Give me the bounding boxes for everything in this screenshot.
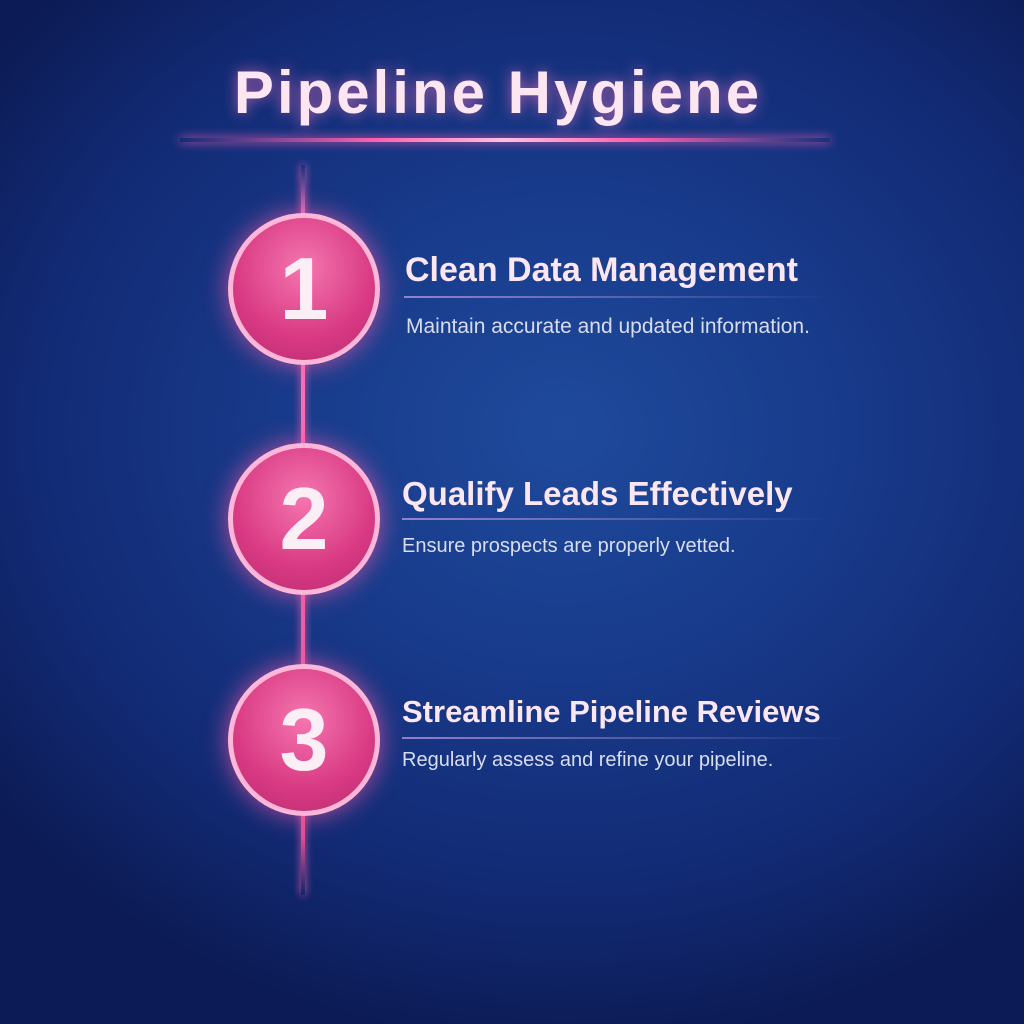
- description 3: Regularly assess and refine your pipeline.: [402, 749, 773, 771]
- number circle 1: [228, 213, 380, 365]
- heading 3: Streamline Pipeline Reviews: [402, 694, 821, 729]
- heading 2: Qualify Leads Effectively: [402, 475, 793, 512]
- step 3: [210, 646, 823, 834]
- title underline glow: [180, 138, 830, 142]
- heading 1: Clean Data Management: [405, 251, 798, 289]
- title: Pipeline Hygiene: [234, 59, 762, 126]
- number circle 3: [228, 664, 380, 816]
- description 1: Maintain accurate and updated information.: [406, 315, 810, 338]
- description 2: Ensure prospects are properly vetted.: [402, 535, 736, 557]
- number circle 2: [228, 443, 380, 595]
- timeline line: [301, 165, 305, 895]
- number circle 3: 3: [280, 690, 328, 789]
- step 2: [210, 426, 804, 613]
- number circle 2: 2: [280, 469, 328, 568]
- number circle 1: 1: [280, 239, 328, 338]
- step 1: [210, 195, 810, 382]
